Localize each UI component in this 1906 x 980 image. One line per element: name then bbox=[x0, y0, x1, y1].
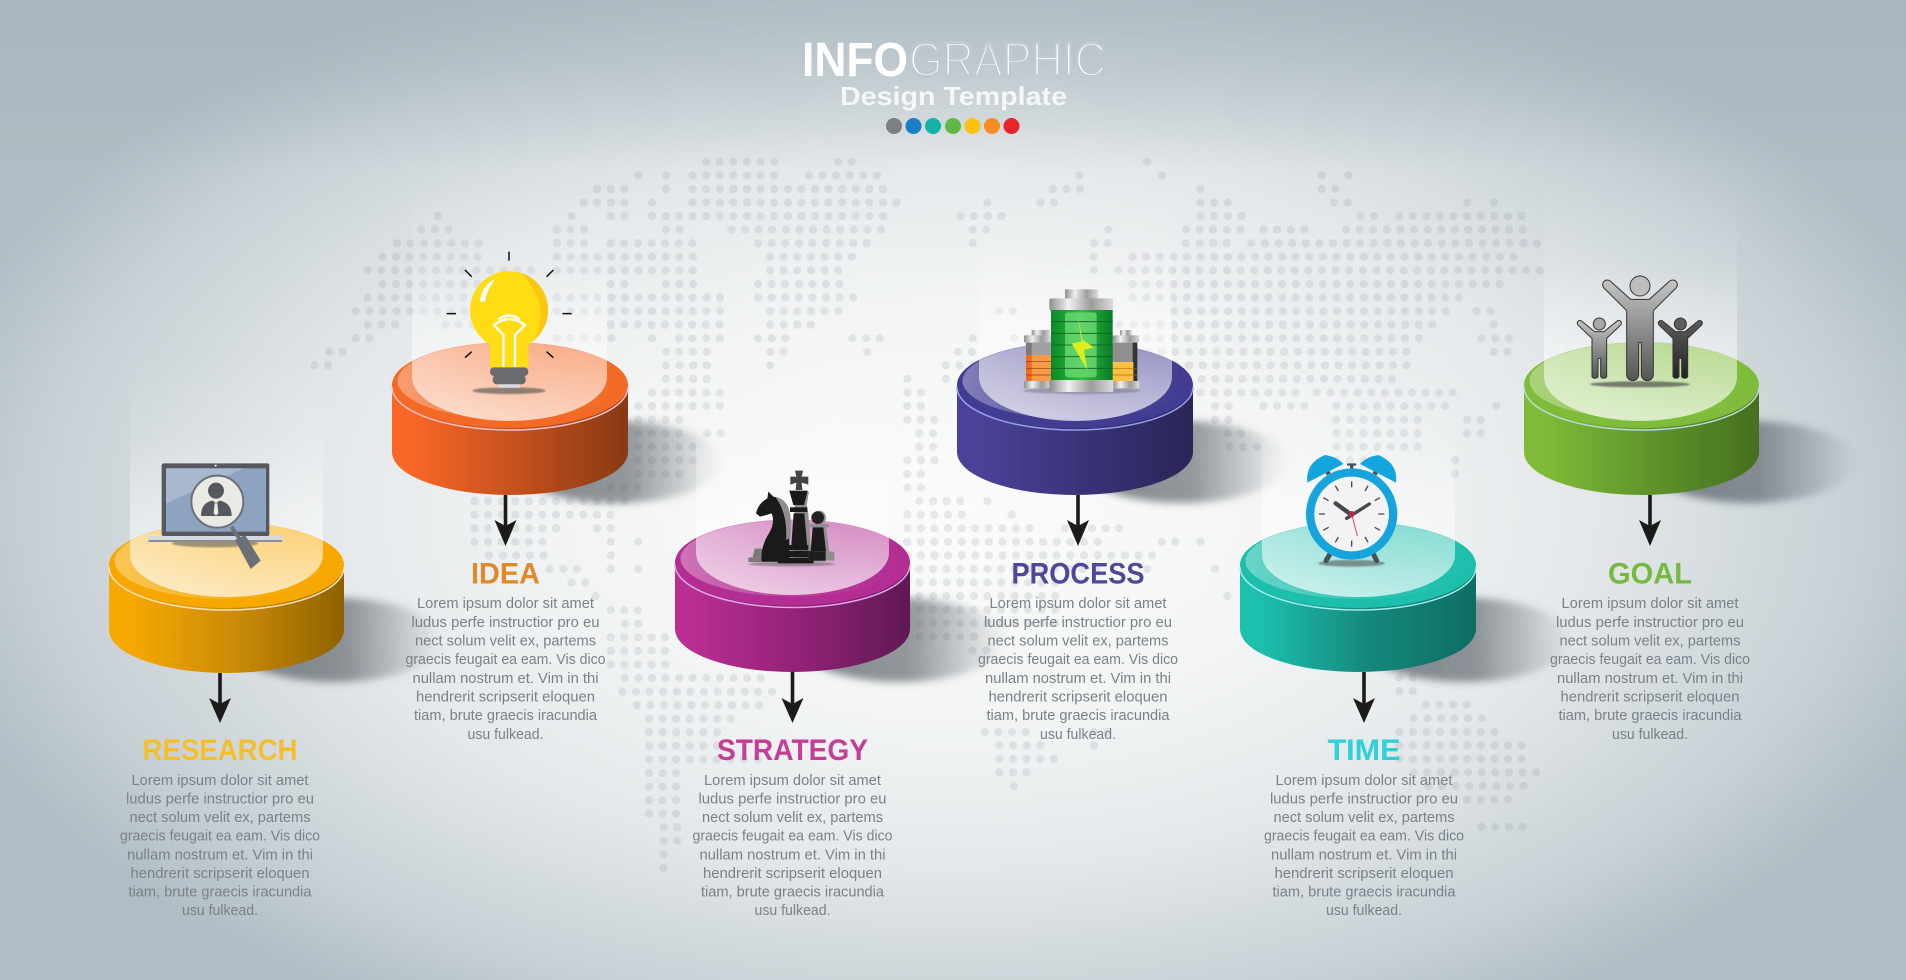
text block: time: graecis feugait ea eam. Vis dico bbox=[1264, 828, 1464, 844]
arrow: time bbox=[1353, 672, 1375, 723]
text block: strategy: Lorem ipsum dolor sit amet bbox=[704, 772, 882, 789]
text block: strategy: usu fulkead. bbox=[754, 902, 830, 919]
text block: process bbox=[978, 595, 1178, 743]
text block: research: nullam nostrum et. Vim in thi bbox=[127, 846, 313, 864]
text block: goal: hendrerit scripserit eloquen bbox=[1560, 688, 1740, 706]
heading: research: RESEARCH bbox=[142, 734, 298, 767]
text block: research: Lorem ipsum dolor sit amet bbox=[132, 772, 309, 789]
icon: battery bbox=[1023, 289, 1140, 394]
text block: idea: nect solum velit ex, partems bbox=[415, 632, 596, 650]
text block: research: graecis feugait ea eam. Vis dico bbox=[120, 828, 320, 844]
text block: time: nullam nostrum et. Vim in thi bbox=[1271, 846, 1457, 864]
text block: research bbox=[120, 772, 320, 919]
text block: time: ludus perfe instructior pro eu bbox=[1270, 790, 1458, 808]
colour dots bbox=[886, 118, 1020, 134]
text block: idea bbox=[406, 595, 606, 743]
text block: process: Lorem ipsum dolor sit amet bbox=[990, 595, 1167, 612]
disc: research bbox=[109, 522, 344, 673]
heading: idea: IDEA bbox=[471, 558, 540, 590]
title: Design Template bbox=[840, 81, 1067, 111]
text block: goal: ludus perfe instructior pro eu bbox=[1556, 614, 1744, 631]
text block: goal: Lorem ipsum dolor sit amet bbox=[1562, 595, 1739, 612]
text block: idea: nullam nostrum et. Vim in thi bbox=[412, 670, 598, 687]
text block: idea: usu fulkead. bbox=[468, 726, 544, 743]
icon: light bulb bbox=[447, 252, 572, 394]
text block: process: nullam nostrum et. Vim in thi bbox=[985, 670, 1171, 687]
text block: goal bbox=[1550, 595, 1750, 743]
text block: time: nect solum velit ex, partems bbox=[1274, 809, 1454, 826]
disc: idea bbox=[392, 342, 628, 495]
arrow: strategy bbox=[782, 672, 804, 723]
disc shadows bbox=[229, 421, 1856, 682]
text block: goal: graecis feugait ea eam. Vis dico bbox=[1550, 651, 1750, 668]
text block: goal: tiam, brute graecis iracundia bbox=[1558, 707, 1742, 724]
text block: idea: hendrerit scripserit eloquen bbox=[416, 688, 595, 706]
text block: process: ludus perfe instructior pro eu bbox=[984, 614, 1172, 631]
heading: time: TIME bbox=[1328, 734, 1400, 767]
text block: strategy: hendrerit scripserit eloquen bbox=[703, 865, 882, 882]
icon: people bbox=[1577, 276, 1702, 387]
text block: strategy: nect solum velit ex, partems bbox=[702, 809, 883, 826]
disc: process bbox=[957, 342, 1193, 495]
title bbox=[802, 34, 1106, 111]
disc: time bbox=[1240, 522, 1476, 672]
text block: strategy: graecis feugait ea eam. Vis dico bbox=[692, 828, 892, 844]
disc: goal bbox=[1524, 342, 1759, 495]
text block: idea: graecis feugait ea eam. Vis dico bbox=[406, 651, 606, 668]
text block: strategy: tiam, brute graecis iracundia bbox=[701, 884, 885, 900]
text block: time: Lorem ipsum dolor sit amet bbox=[1276, 772, 1453, 789]
icon: chess pieces bbox=[748, 471, 835, 566]
arrow: idea bbox=[494, 495, 516, 546]
text block: idea: ludus perfe instructior pro eu bbox=[412, 614, 600, 631]
text block: research: ludus perfe instructior pro eu bbox=[126, 790, 314, 808]
text block: process: nect solum velit ex, partems bbox=[988, 632, 1168, 650]
text block: process: usu fulkead. bbox=[1040, 726, 1116, 743]
heading: strategy: STRATEGY bbox=[717, 734, 868, 767]
text block: time: hendrerit scripserit eloquen bbox=[1274, 865, 1454, 882]
text block: research: hendrerit scripserit eloquen bbox=[130, 865, 310, 882]
text block: process: graecis feugait ea eam. Vis dico bbox=[978, 651, 1178, 668]
text block: research: nect solum velit ex, partems bbox=[130, 809, 310, 826]
text block: goal: usu fulkead. bbox=[1612, 726, 1688, 743]
heading: process: PROCESS bbox=[1012, 558, 1144, 590]
text block: time: usu fulkead. bbox=[1326, 902, 1402, 919]
text block: time bbox=[1264, 772, 1464, 919]
title: INFO bbox=[802, 34, 908, 87]
text block: process: tiam, brute graecis iracundia bbox=[986, 707, 1170, 724]
text block: strategy: ludus perfe instructior pro eu bbox=[698, 790, 886, 808]
dotted world map bbox=[315, 162, 1540, 868]
text block: strategy: nullam nostrum et. Vim in thi bbox=[700, 846, 886, 864]
arrow: goal bbox=[1639, 495, 1661, 546]
icon: laptop with magnifier bbox=[148, 463, 282, 569]
arrow: process bbox=[1067, 495, 1089, 546]
text block: goal: nect solum velit ex, partems bbox=[1560, 632, 1740, 650]
arrow: research bbox=[209, 673, 231, 723]
text block: strategy bbox=[692, 772, 892, 919]
text block: process: hendrerit scripserit eloquen bbox=[988, 688, 1168, 706]
icon: alarm clock bbox=[1306, 455, 1397, 567]
text block: idea: Lorem ipsum dolor sit amet bbox=[417, 595, 595, 612]
text block: research: tiam, brute graecis iracundia bbox=[128, 884, 312, 900]
heading: goal: GOAL bbox=[1608, 558, 1692, 590]
text block: research: usu fulkead. bbox=[182, 902, 258, 919]
glass panels bbox=[130, 179, 1737, 597]
text block: idea: tiam, brute graecis iracundia bbox=[414, 707, 598, 724]
text block: goal: nullam nostrum et. Vim in thi bbox=[1557, 670, 1743, 687]
text block: time: tiam, brute graecis iracundia bbox=[1272, 884, 1456, 900]
disc: strategy bbox=[675, 520, 910, 672]
title: GRAPHIC bbox=[909, 34, 1106, 87]
